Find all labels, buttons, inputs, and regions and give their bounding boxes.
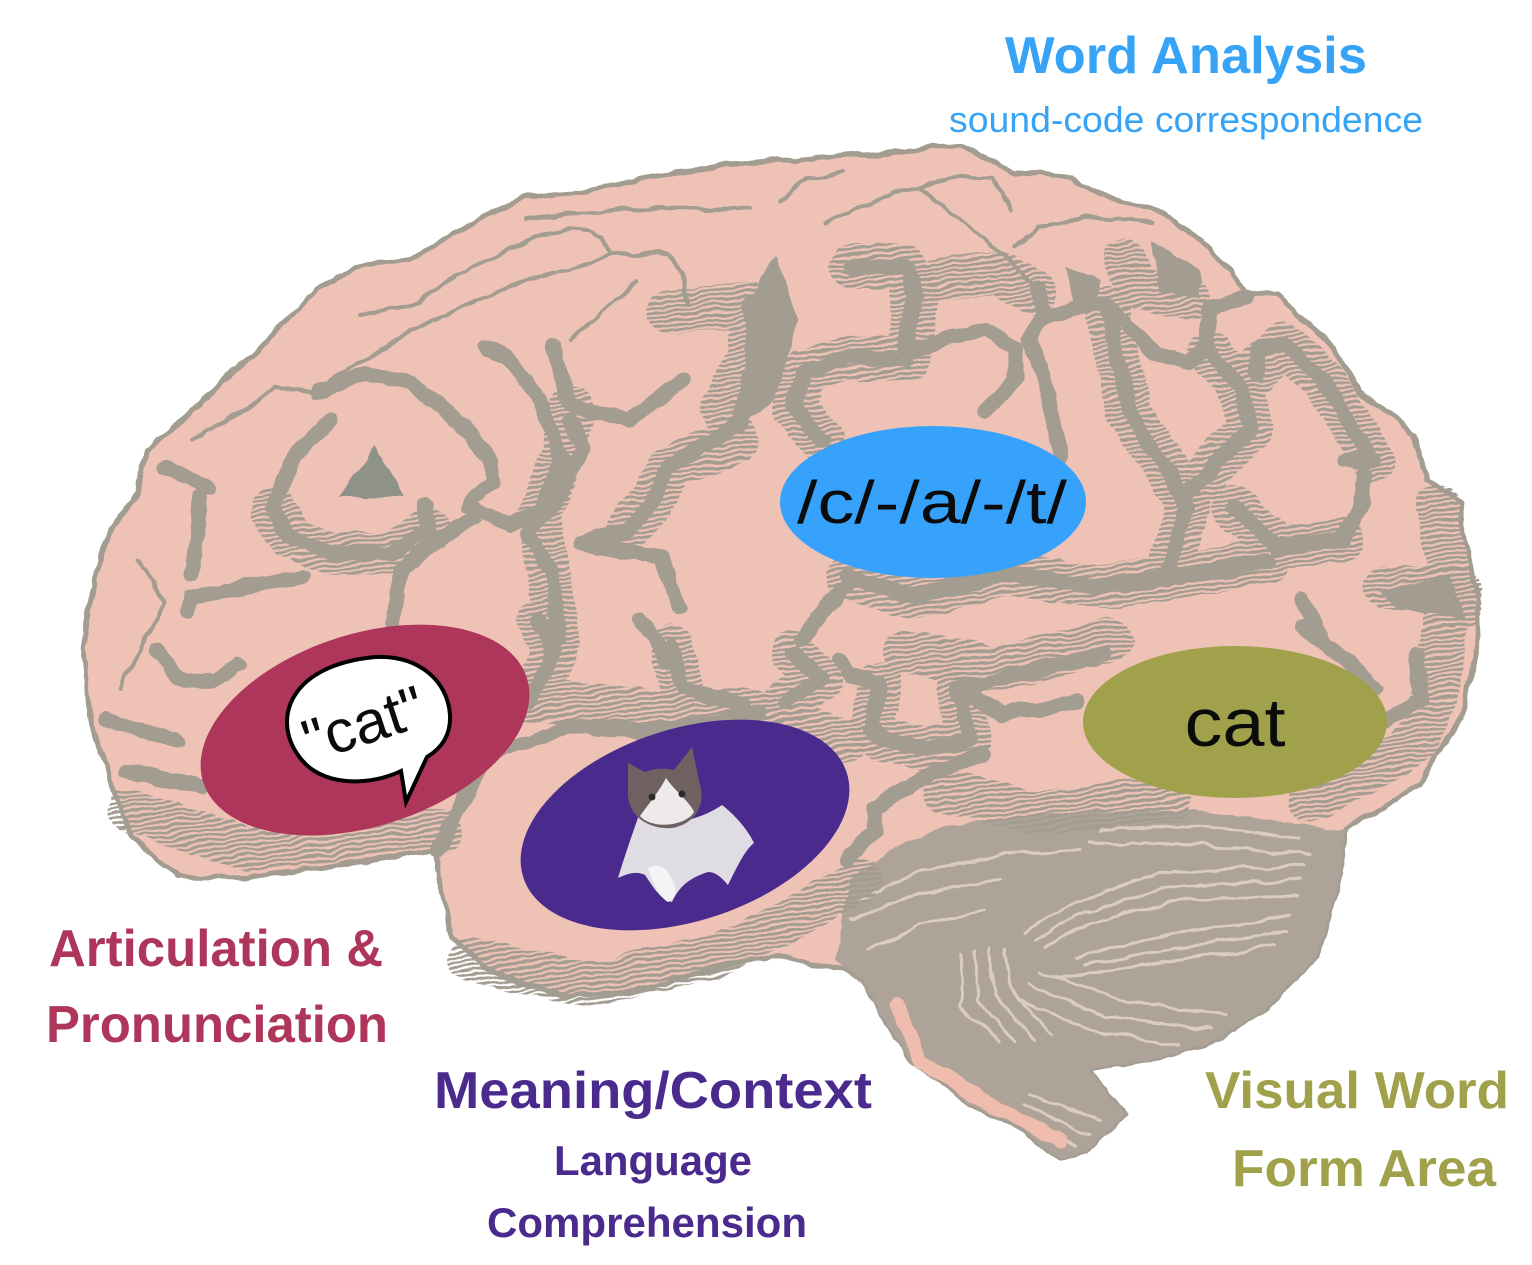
fine sulci lines	[120, 173, 1151, 690]
heading: articulation and pronunciation: Pronunciation	[46, 996, 388, 1054]
brain illustration	[83, 145, 1478, 1157]
cerebellum striations	[850, 825, 1310, 1145]
heading: articulation and pronunciation	[46, 920, 388, 1054]
cat eyes	[648, 794, 656, 800]
brainstem highlight	[897, 1006, 1059, 1139]
heading: meaning and context: Meaning/Context	[434, 1062, 872, 1120]
icon: speech bubble	[287, 657, 450, 802]
cat body	[618, 805, 754, 902]
region: visual word form ellipse: cat	[1184, 685, 1286, 761]
thick sulci folds	[105, 267, 1422, 859]
region: meaning ellipse	[494, 681, 876, 969]
triangular fold	[339, 447, 406, 498]
icon: speech bubble: "cat"	[294, 673, 433, 775]
region: articulation ellipse	[174, 586, 556, 874]
heading: meaning and context	[434, 1062, 872, 1246]
region: visual word form ellipse	[1083, 646, 1387, 798]
cat face blaze	[640, 778, 694, 825]
cat paw	[648, 866, 675, 902]
heading: word analysis: Word Analysis	[1005, 27, 1367, 85]
heading: articulation and pronunciation: Articulation &	[49, 920, 383, 978]
region: word analysis ellipse	[780, 426, 1086, 578]
heading: visual word form area: Form Area	[1232, 1140, 1497, 1198]
hatched shading along folds	[130, 260, 1459, 985]
region: word analysis ellipse: /c/-/a/-/t/	[797, 469, 1067, 536]
cerebellum	[835, 809, 1346, 1157]
heading: word analysis: sound-code correspondence	[949, 99, 1423, 140]
heading: visual word form area	[1205, 1062, 1509, 1198]
cerebrum and brainstem silhouette	[83, 145, 1478, 1157]
heading: word analysis	[949, 27, 1423, 140]
heading: meaning and context: Language	[554, 1137, 752, 1184]
icon: cat	[618, 747, 754, 902]
heading: meaning and context: Comprehension	[487, 1199, 807, 1246]
heading: visual word form area: Visual Word	[1205, 1062, 1509, 1120]
cat head	[628, 747, 702, 828]
dark fold patches	[745, 240, 1465, 620]
